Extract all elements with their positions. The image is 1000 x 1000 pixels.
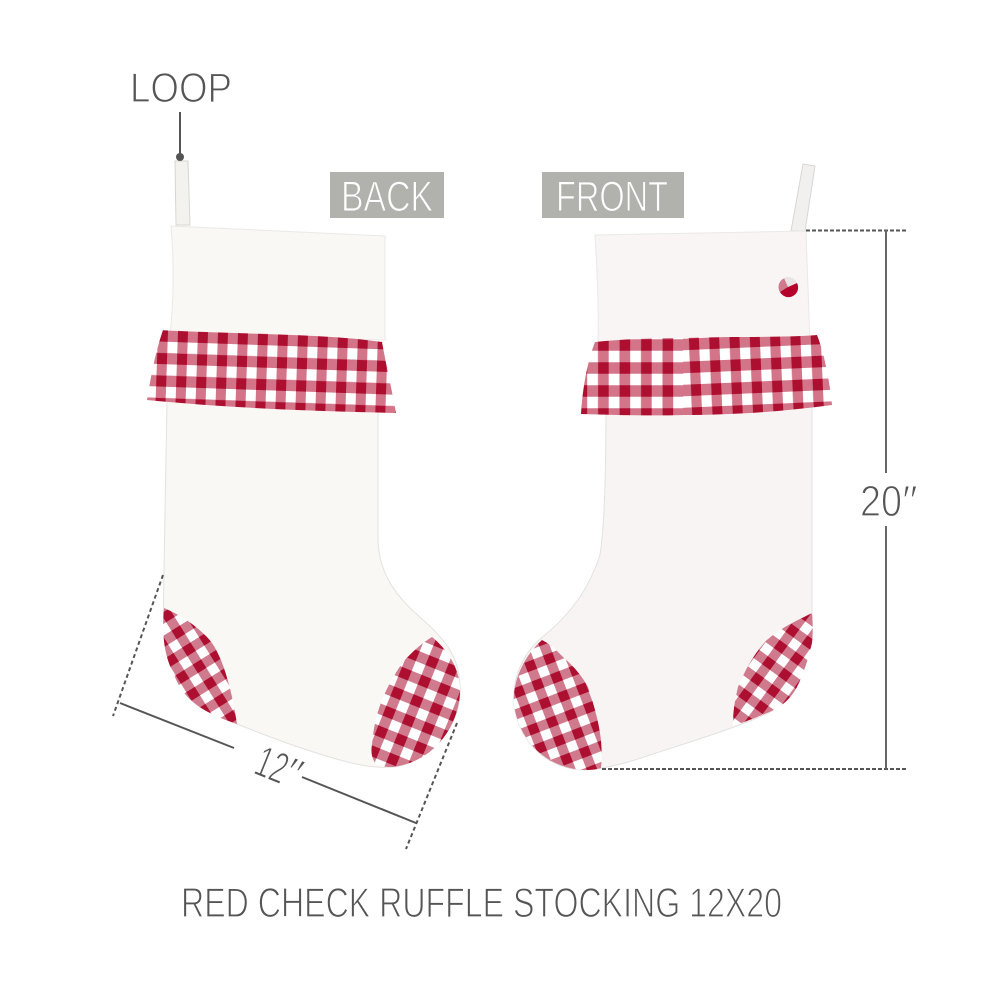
back cuff bbox=[170, 226, 385, 340]
height value: ″ bbox=[900, 477, 917, 526]
loop leader line bbox=[176, 112, 184, 161]
back body bbox=[164, 400, 460, 767]
front toe patch bbox=[514, 640, 602, 770]
width value: 12 bbox=[248, 737, 295, 794]
product title: RED CHECK RUFFLE STOCKING 12X20 bbox=[181, 879, 782, 926]
front stocking bbox=[514, 164, 832, 770]
width value: ″ bbox=[275, 748, 309, 800]
back stocking bbox=[147, 161, 460, 767]
back ruffle bbox=[147, 330, 396, 413]
back heel patch bbox=[163, 608, 237, 724]
front heel patch bbox=[733, 613, 813, 726]
width dimension bbox=[113, 575, 457, 849]
back label: BACK bbox=[341, 173, 433, 221]
height value: 20 bbox=[860, 477, 902, 526]
front label: FRONT bbox=[556, 173, 668, 221]
front body bbox=[514, 405, 812, 770]
height dimension bbox=[602, 230, 917, 769]
back hanging loop bbox=[175, 161, 190, 225]
loop label: LOOP bbox=[130, 64, 232, 111]
front button bbox=[778, 277, 798, 297]
back toe patch bbox=[371, 637, 460, 767]
front cuff bbox=[595, 231, 810, 345]
front ruffle bbox=[581, 335, 832, 415]
loop callout bbox=[130, 64, 232, 161]
front hanging loop bbox=[791, 164, 815, 231]
